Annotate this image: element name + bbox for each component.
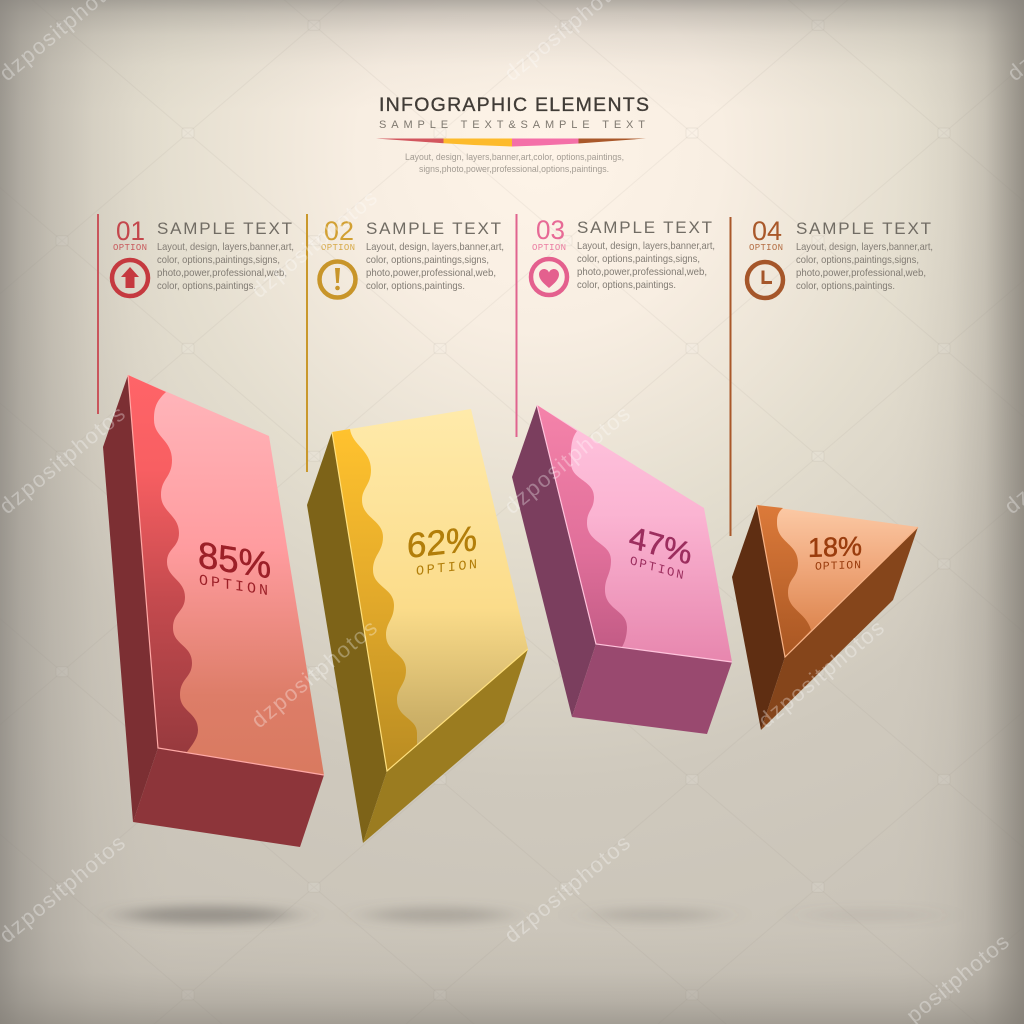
- panel: option 02: OPTION: [321, 243, 355, 253]
- title: INFOGRAPHIC ELEMENTS: [379, 94, 649, 116]
- floor shadows: [123, 906, 936, 924]
- panel: option 02: 02: [324, 216, 354, 246]
- 3D block: 62% yellow: [307, 409, 528, 843]
- panel: option 04: SAMPLE TEXT: [796, 219, 931, 238]
- panel: option 02: color, options,paintings,signs,: [366, 254, 489, 266]
- panel: option 01: [112, 216, 294, 296]
- panel: option 03: photo,power,professional,web,: [577, 266, 707, 278]
- label: 47%: 47%: [627, 519, 694, 572]
- panel: option 04: [747, 216, 933, 298]
- panel: option 04: 04: [752, 216, 782, 246]
- panel: option 01: Layout, design, layers,banner,art,: [157, 241, 294, 253]
- panel: option 01: color, options,paintings.: [157, 280, 256, 292]
- subtitle: SAMPLE TEXT&SAMPLE TEXT: [379, 119, 645, 131]
- leader line 3: [516, 214, 518, 437]
- 3D block: 47% pink: [512, 405, 732, 734]
- panel: option 03: 03: [536, 215, 565, 245]
- panel: option 04: color, options,paintings.: [796, 280, 895, 292]
- panel: option 04: color, options,paintings,signs,: [796, 254, 919, 266]
- panel: option 03: color, options,paintings.: [577, 279, 676, 291]
- watermarks: dzpositphotos: [246, 615, 382, 733]
- panel: option 04: OPTION: [749, 243, 783, 253]
- icon: clock: [747, 262, 783, 298]
- panel: option 01: photo,power,professional,web,: [157, 267, 287, 279]
- watermarks: dzpositphotos: [753, 615, 889, 733]
- icon: exclamation mark: [320, 262, 356, 298]
- panel: option 02: SAMPLE TEXT: [366, 219, 501, 238]
- panel: option 02: Layout, design, layers,banner,art,: [366, 241, 504, 253]
- label: 18%: OPTION: [815, 559, 861, 574]
- panel: option 01: SAMPLE TEXT: [157, 219, 292, 238]
- icon: up arrow: [112, 260, 148, 296]
- leader line 1: [97, 214, 99, 414]
- panel: option 02: [320, 216, 504, 298]
- label: 85%: 85%: [198, 533, 271, 587]
- panel: option 04: Layout, design, layers,banner,art,: [796, 241, 933, 253]
- panel: option 01: OPTION: [113, 243, 147, 253]
- label: 18%: 18%: [808, 531, 862, 563]
- 3D block: 18% brown: [732, 505, 918, 730]
- panel: option 01: 01: [116, 216, 145, 246]
- icon: heart: [531, 259, 567, 295]
- panel: option 03: color, options,paintings,signs,: [577, 253, 700, 265]
- title block: [376, 94, 649, 174]
- intro text: signs,photo,power,professional,options,paintings.: [419, 164, 609, 174]
- intro text: [405, 152, 624, 174]
- panel: option 03: SAMPLE TEXT: [577, 218, 712, 237]
- panel: option 04: photo,power,professional,web,: [796, 267, 926, 279]
- leader line 2: [306, 214, 308, 472]
- panel: option 02: color, options,paintings.: [366, 280, 465, 292]
- label: 62%: 62%: [407, 519, 477, 566]
- label: 62%: OPTION: [416, 558, 477, 580]
- leader line 4: [730, 217, 732, 536]
- panel: option 03: OPTION: [532, 243, 566, 253]
- label: 47%: OPTION: [629, 554, 684, 583]
- label: 85%: OPTION: [199, 571, 268, 600]
- watermarks: dzpositphotos: [246, 185, 382, 303]
- intro text: Layout, design, layers,banner,art,color, options,paintings,: [405, 152, 624, 162]
- watermarks: dzpositphotos: [499, 401, 635, 519]
- 3D block: 85% red: [103, 375, 324, 847]
- tapered colour bar: [376, 138, 646, 146]
- panel: option 03: Layout, design, layers,banner,art,: [577, 240, 715, 252]
- watermarks: dzpositphotos: [499, 830, 635, 948]
- panel: option 01: color, options,paintings,signs,: [157, 254, 280, 266]
- panel: option 02: photo,power,professional,web,: [366, 267, 496, 279]
- panel: option 03: [531, 215, 715, 295]
